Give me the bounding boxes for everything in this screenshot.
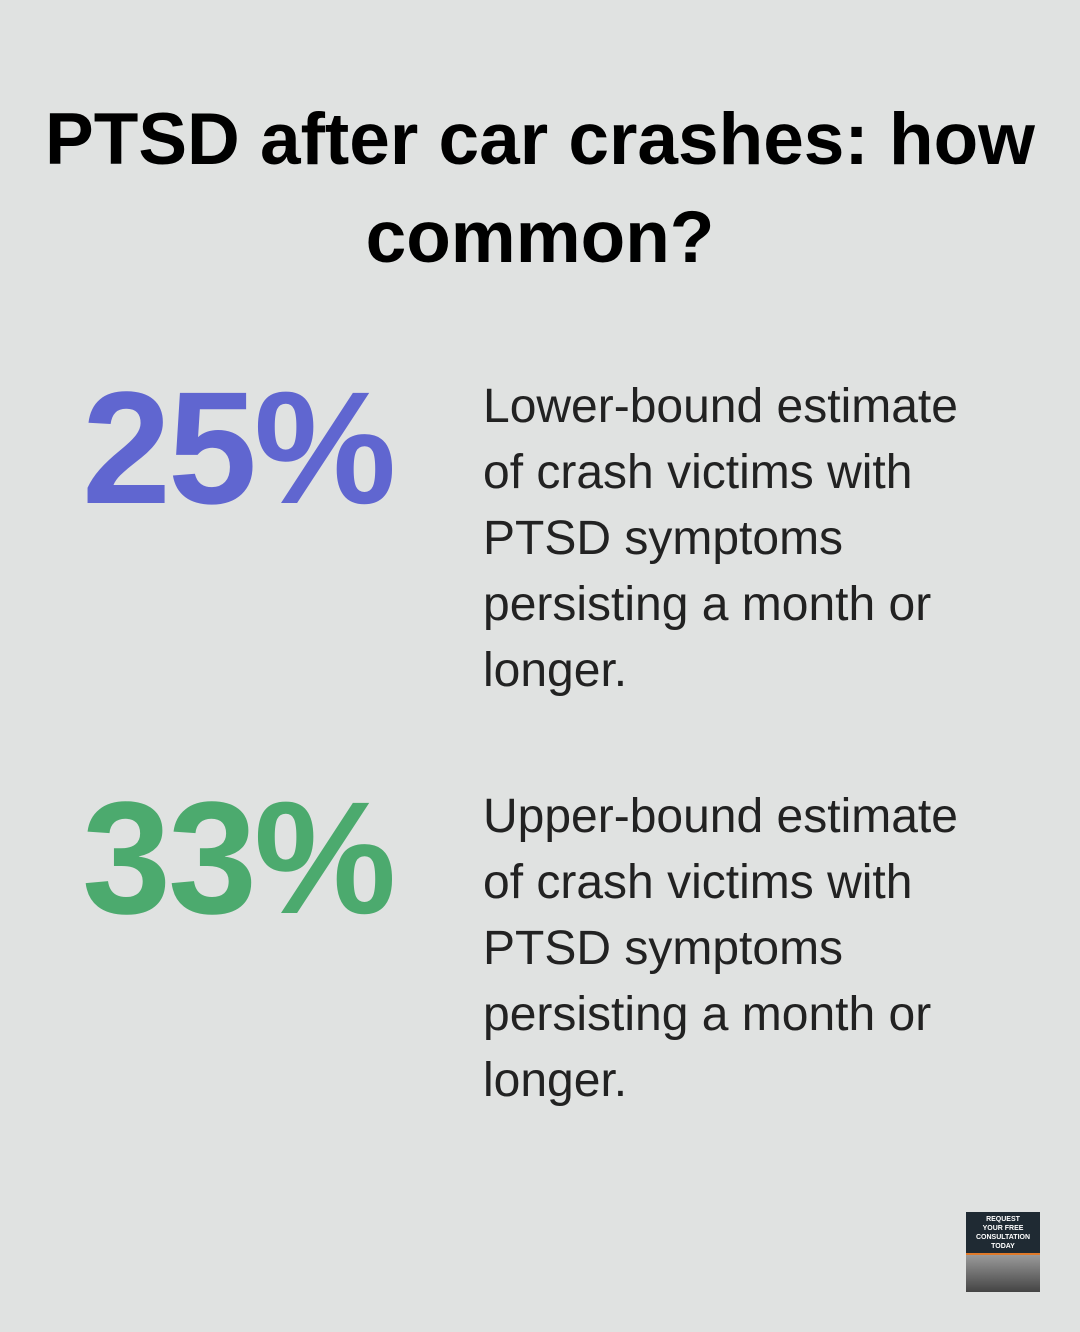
logo: consultation badge: CONSULTATION xyxy=(976,1234,1030,1241)
text: upper bound: persisting a month or xyxy=(483,988,931,1041)
title xyxy=(45,99,1035,278)
text: upper bound: Upper-bound estimate xyxy=(483,790,958,843)
text: lower bound: PTSD symptoms xyxy=(483,512,843,565)
text: lower bound xyxy=(483,380,958,697)
title: PTSD after car crashes: how xyxy=(45,99,1035,180)
text: upper bound: PTSD symptoms xyxy=(483,922,843,975)
stat: 25%: 25% xyxy=(82,358,393,537)
text: lower bound: longer. xyxy=(483,644,627,697)
stat: 33%: 33% xyxy=(82,768,393,947)
text: lower bound: persisting a month or xyxy=(483,578,931,631)
logo: consultation badge: REQUEST xyxy=(986,1216,1020,1223)
logo: consultation badge: TODAY xyxy=(991,1243,1015,1250)
logo: consultation badge: YOUR FREE xyxy=(983,1225,1023,1232)
text: upper bound xyxy=(483,790,958,1107)
text: lower bound: Lower-bound estimate xyxy=(483,380,958,433)
title: common? xyxy=(366,197,714,278)
logo: consultation badge xyxy=(966,1212,1040,1292)
text: upper bound: of crash victims with xyxy=(483,856,912,909)
text: lower bound: of crash victims with xyxy=(483,446,912,499)
text: upper bound: longer. xyxy=(483,1054,627,1107)
